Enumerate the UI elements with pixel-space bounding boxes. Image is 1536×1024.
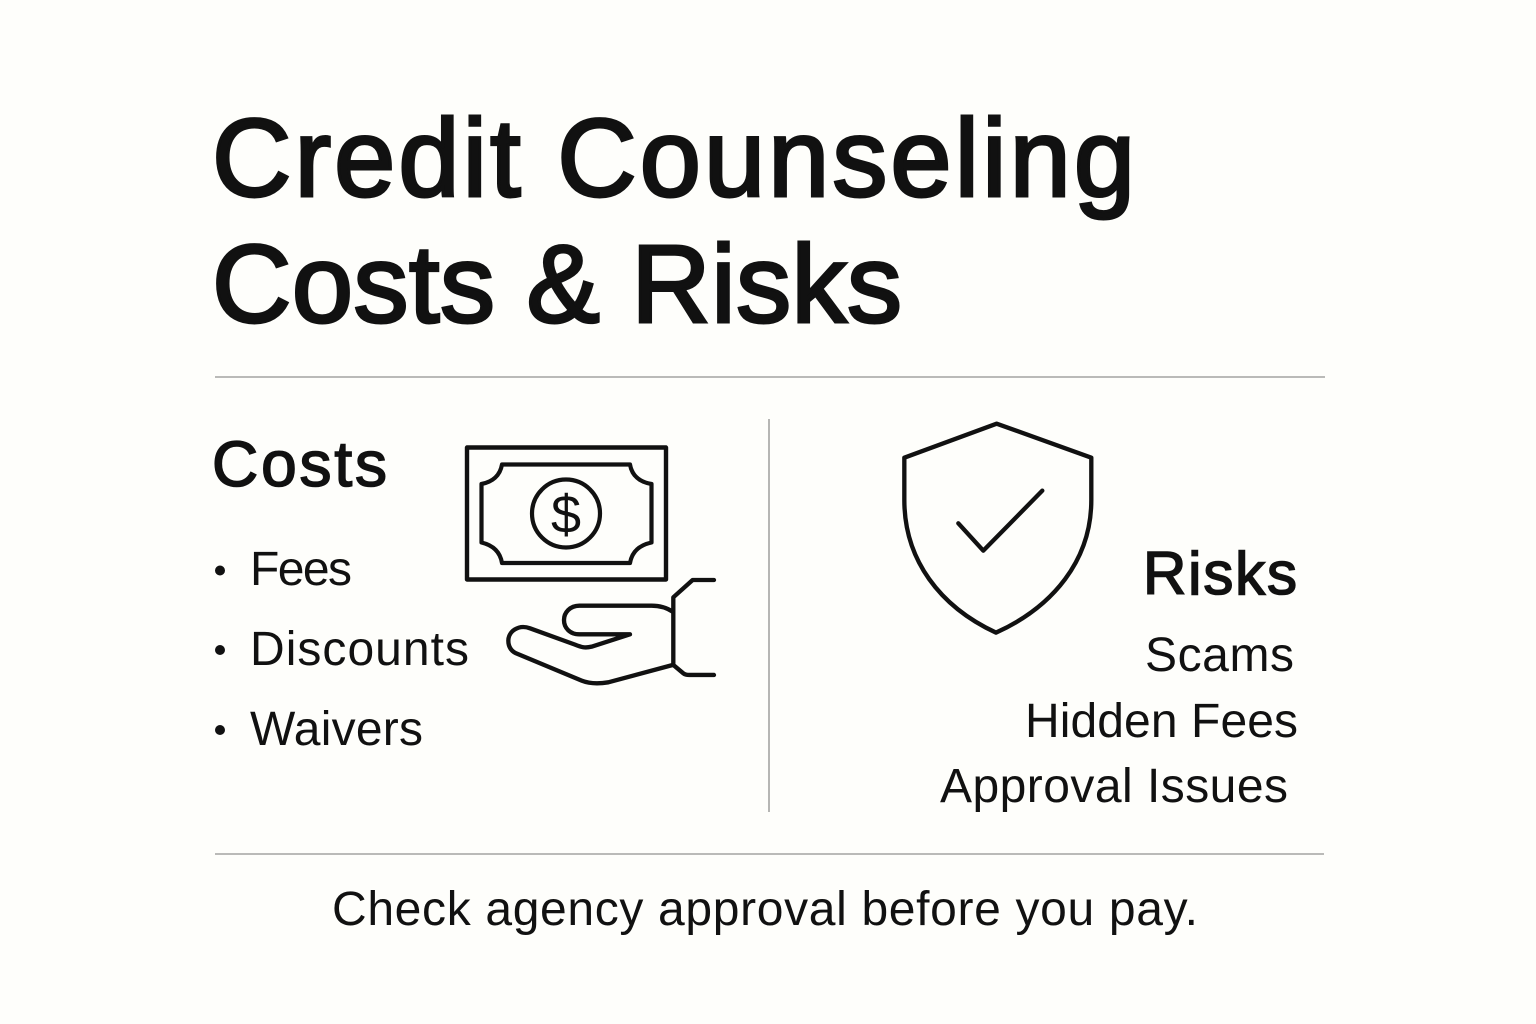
list: risks items bbox=[940, 629, 1298, 813]
list: costs items bbox=[215, 543, 469, 756]
list: risks items: Scams bbox=[1145, 629, 1294, 682]
icon: open hand bbox=[508, 580, 714, 683]
list: costs items: Waivers bbox=[250, 703, 423, 756]
title: Credit Counseling bbox=[212, 97, 1135, 220]
list: costs items: Fees bbox=[250, 543, 352, 596]
heading: risks: Risks bbox=[1143, 540, 1297, 607]
list: risks items: Hidden Fees bbox=[1025, 695, 1298, 748]
list: risks items: Approval Issues bbox=[940, 760, 1288, 813]
list: costs items: Discounts bbox=[250, 623, 469, 676]
footer note: Check agency approval before you pay. bbox=[332, 883, 1198, 936]
title: Costs & Risks bbox=[212, 223, 902, 346]
icon: banknote: $ bbox=[551, 485, 581, 545]
title bbox=[212, 97, 1135, 346]
panel: risks bbox=[904, 424, 1298, 813]
icon: shield with check bbox=[904, 424, 1091, 633]
panel: costs bbox=[212, 428, 714, 756]
icon: banknote bbox=[467, 448, 666, 580]
heading: costs: Costs bbox=[212, 428, 387, 500]
